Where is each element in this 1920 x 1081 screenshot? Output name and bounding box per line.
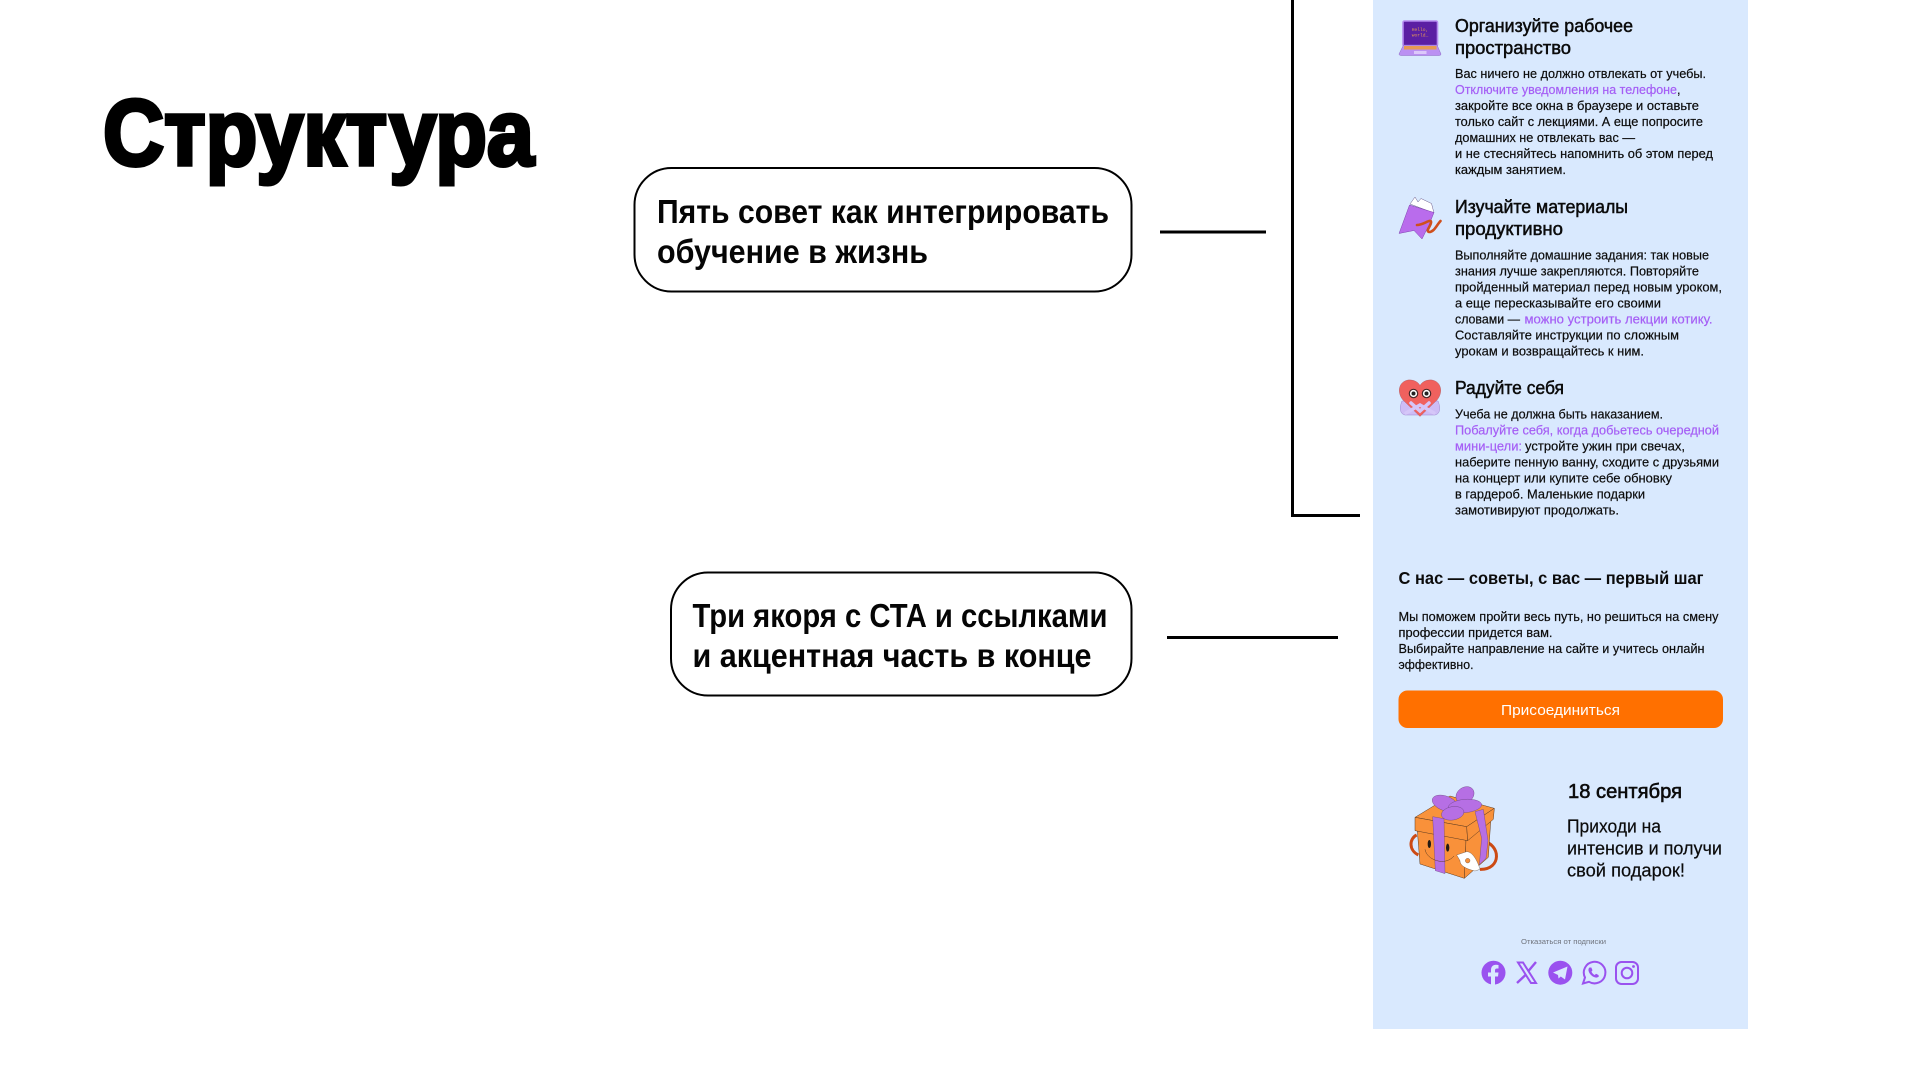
icon: X [1517,962,1536,983]
text block: organize workspace: каждым занятием. [1455,163,1566,177]
text block: reward yourself: на концерт или купите себе обновку [1455,472,1673,486]
illustration: gift box [1411,783,1496,878]
title: Структура [103,80,535,185]
heading: first step: С нас — советы, с вас — первый шаг [1398,568,1704,588]
text block: reward yourself: Учеба не должна быть наказанием. [1455,408,1663,422]
text block: first step: эффективно. [1398,658,1474,672]
icon: book with worm [1399,197,1440,239]
text block: intensive invitation: Приходи на [1567,817,1662,837]
text block: reward yourself: в гардероб. Маленькие подарки [1455,488,1645,502]
icon: heart character [1399,380,1441,416]
text block: organize workspace: домашних не отвлекать вас — [1455,131,1635,145]
callout: three anchors: Три якоря с СТА и ссылками [692,597,1108,634]
heading: organize workspace: пространство [1455,38,1571,58]
connector: five tips to bracket [1160,230,1266,234]
text block: reward yourself: устройте ужин при свечах, [1525,440,1685,454]
button: join: Присоединиться [1501,702,1620,719]
icon: laptop: world_ [1412,32,1429,38]
text block: study productively: можно устроить лекции котику. [1524,312,1712,326]
text block: organize workspace [1455,67,1714,177]
connector: three anchors to email [1167,636,1338,639]
text block: intensive invitation: интенсив и получи [1567,839,1722,859]
panel: email newsletter [1373,0,1748,1029]
icon: whatsapp [1583,962,1605,984]
text block: organize workspace: Вас ничего не должно отвлекать от учебы. [1455,67,1706,81]
heading: study productively: Изучайте материалы [1455,197,1628,217]
heading: study productively [1455,197,1628,239]
text block: study productively: а еще пересказывайте его своими [1455,296,1661,310]
text block: study productively: пройденный материал перед новым уроком, [1455,280,1722,294]
callout: three anchors [671,572,1132,696]
text block: intensive invitation: свой подарок! [1567,861,1685,881]
text block: first step [1398,610,1719,672]
callout: five tips: Пять совет как интегрировать [657,193,1109,230]
text block: organize workspace: и не стесняйтесь напомнить об этом перед [1455,147,1714,161]
heading: reward yourself: Радуйте себя [1455,378,1564,398]
text block: first step: Выбирайте направление на сайте и учитесь онлайн [1398,642,1705,656]
heading: study productively: продуктивно [1455,219,1563,239]
text block: organize workspace: , [1677,83,1680,97]
text block: study productively: словами — [1455,312,1520,326]
text block: study productively [1455,248,1722,358]
heading: organize workspace: Организуйте рабочее [1455,16,1633,36]
footer: unsubscribe link: Отказаться от подписки [1521,937,1606,946]
icon: facebook [1482,961,1506,985]
callout: three anchors: и акцентная часть в конце [692,637,1092,674]
text block: reward yourself: мини-цели: [1455,440,1522,454]
icon: laptop: Hello, [1412,27,1428,33]
panel background [1373,0,1748,1029]
text block: reward yourself: Побалуйте себя, когда добьетесь очередной [1455,424,1719,438]
text block: reward yourself [1455,408,1719,518]
callout: five tips: обучение в жизнь [657,233,928,270]
icon: telegram [1548,961,1572,985]
text block: study productively: Выполняйте домашние задания: так новые [1455,248,1709,262]
social icons [1482,961,1638,985]
text block: study productively: урокам и возвращайтесь к ним. [1455,344,1644,358]
heading: organize workspace [1455,16,1633,58]
text block: reward yourself: замотивируют продолжать. [1455,504,1619,518]
icon: instagram [1616,962,1638,984]
icon: laptop [1399,21,1441,56]
text block: reward yourself: наберите пенную ванну, сходите с друзьями [1455,456,1719,470]
bracket: email section [1292,0,1360,516]
text block: organize workspace: Отключите уведомления на телефоне [1455,83,1677,97]
text block: intensive invitation [1567,817,1722,881]
text block: study productively: знания лучше закрепляются. Повторяйте [1455,264,1699,278]
text block: study productively: Составляйте инструкции по сложным [1455,328,1679,342]
heading: event date: 18 сентября [1568,780,1682,803]
button: join [1398,690,1723,728]
text block: organize workspace: только сайт с лекциями. А еще попросите [1455,115,1703,129]
text block: organize workspace: закройте все окна в браузере и оставьте [1455,99,1699,113]
callout: five tips [634,168,1132,292]
text block: first step: профессии придется вам. [1398,626,1552,640]
text block: first step: Мы поможем пройти весь путь, но решиться на смену [1398,610,1719,624]
